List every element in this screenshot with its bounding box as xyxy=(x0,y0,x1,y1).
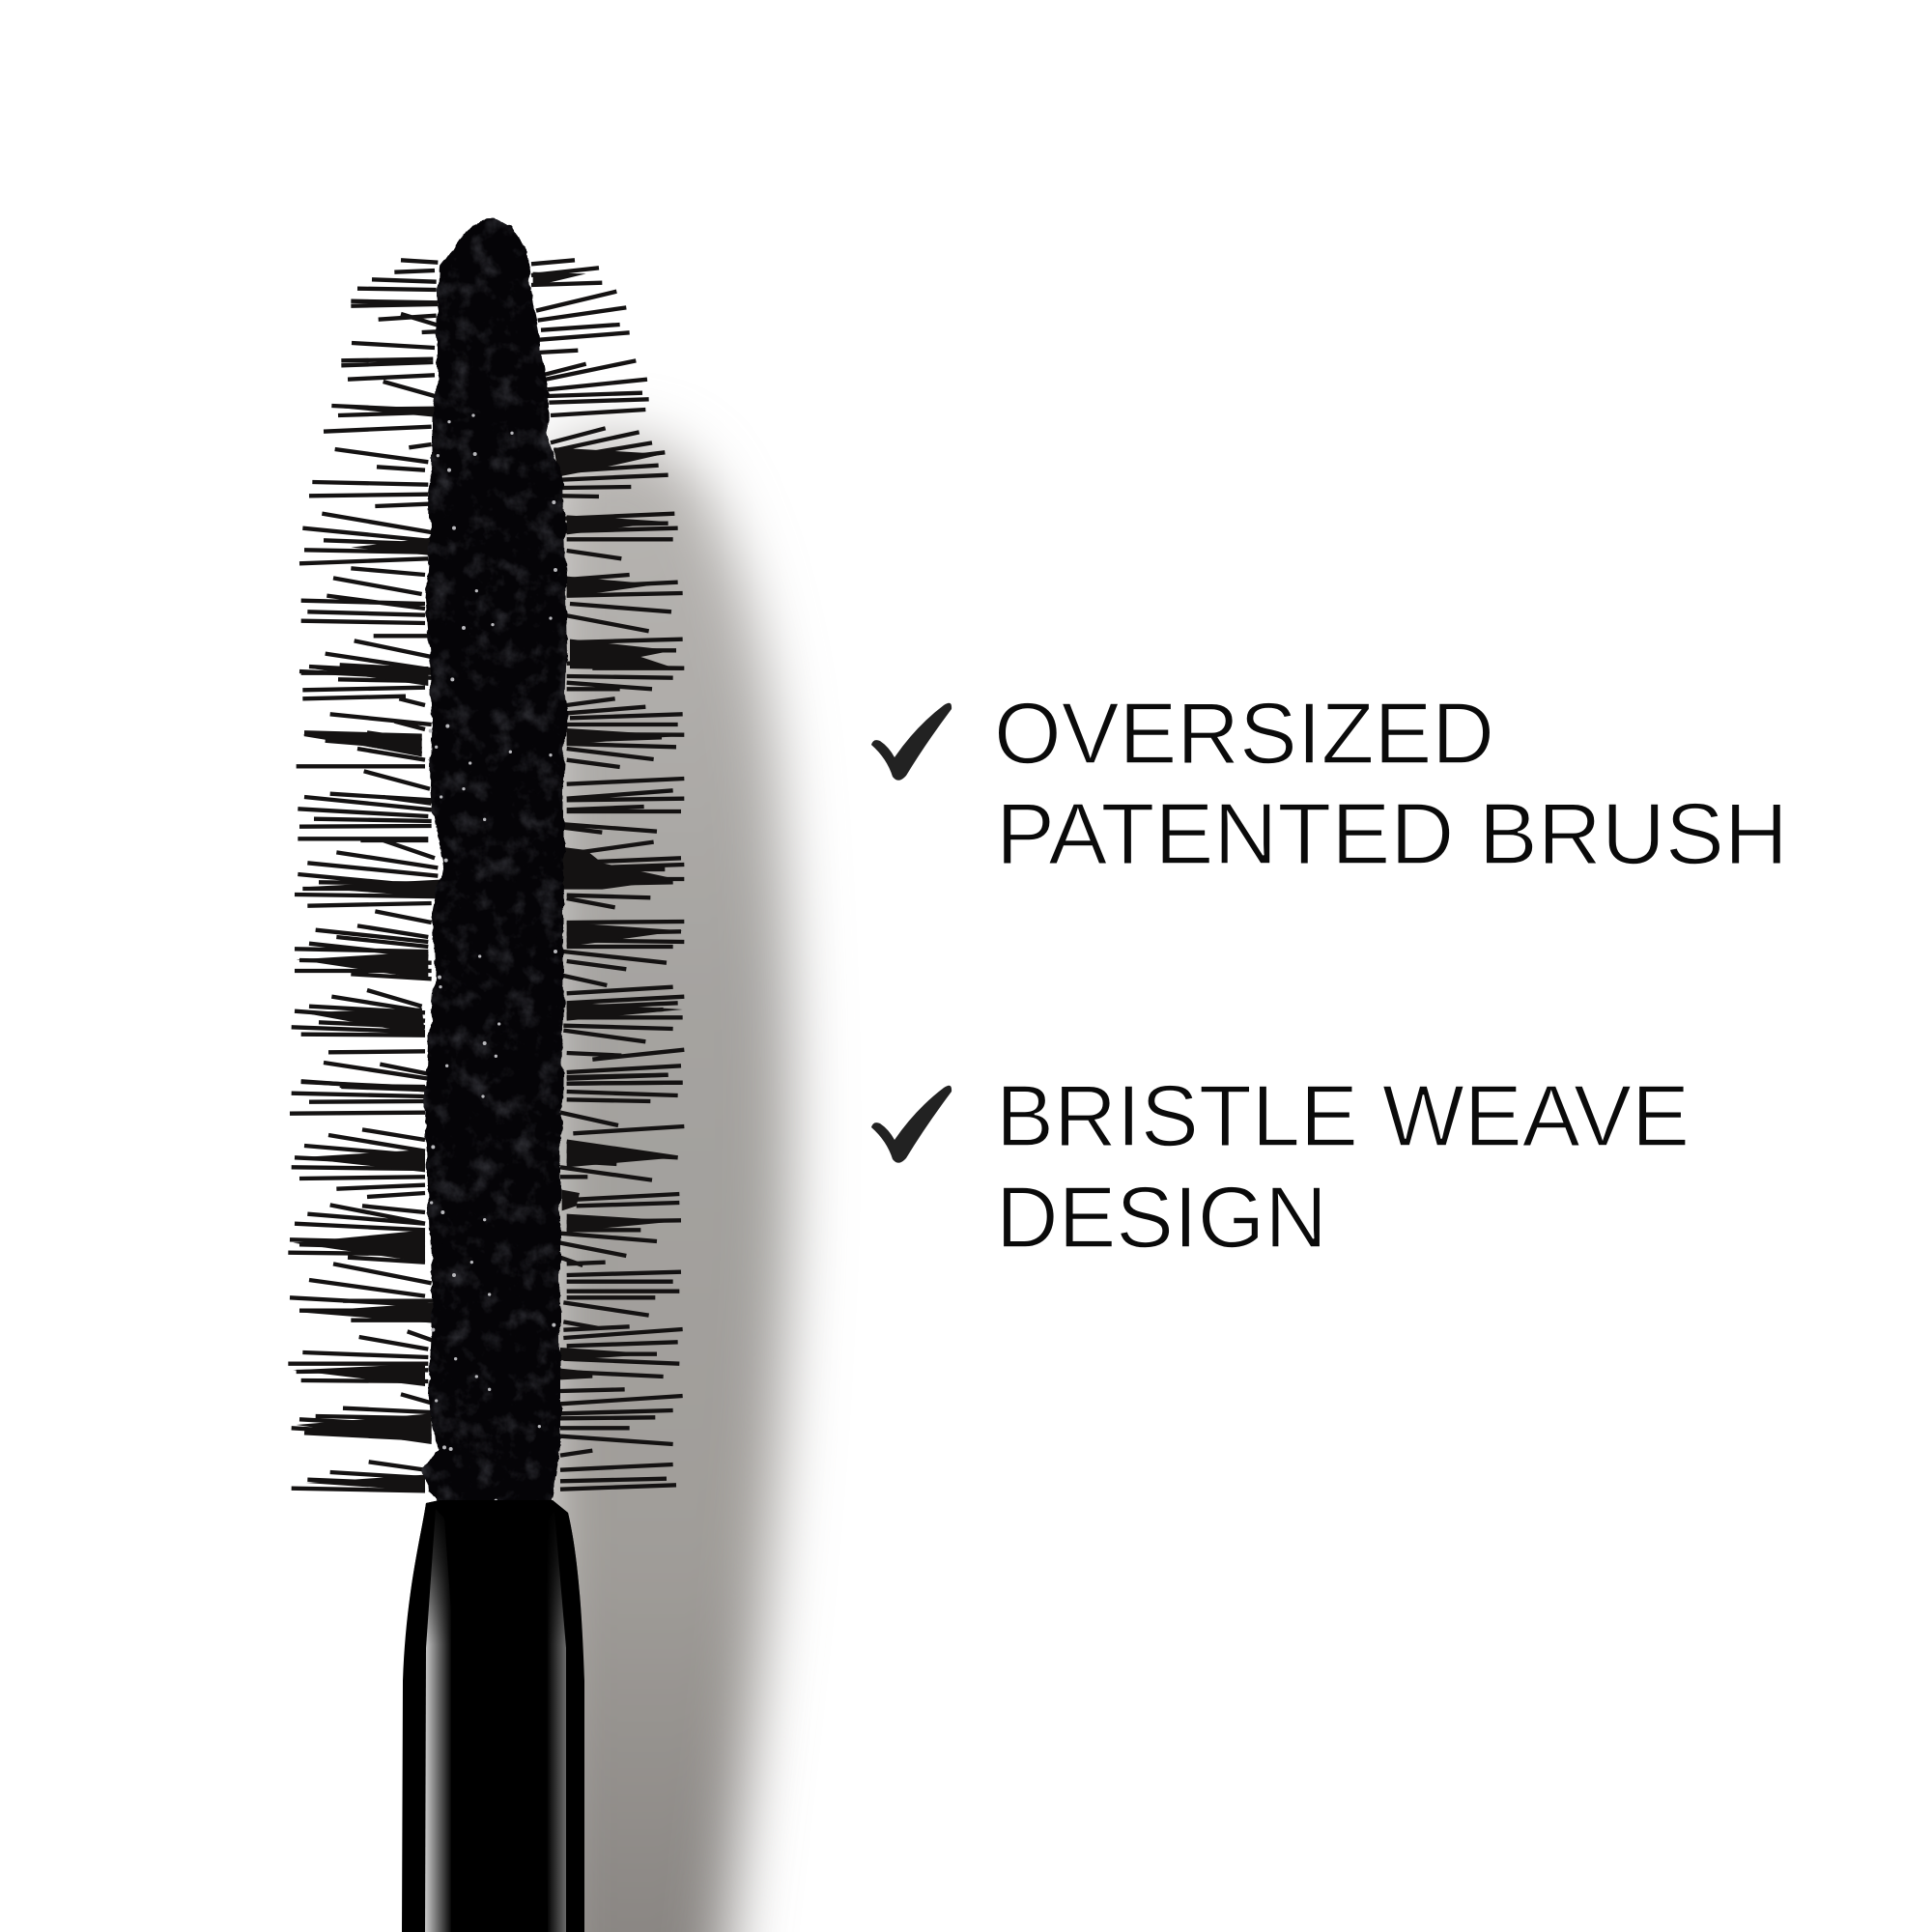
text: design: DESIGN xyxy=(996,1170,1327,1266)
cast shadow of mascara wand xyxy=(541,438,791,1932)
icon: check mark xyxy=(871,703,952,781)
bristles: lower section xyxy=(288,1075,684,1491)
bristles: upper section xyxy=(299,260,683,673)
brush core xyxy=(425,219,568,1503)
text: oversized: OVERSIZED xyxy=(994,686,1494,782)
feature: bristle weave design xyxy=(871,1068,1690,1266)
ferrule xyxy=(396,1500,589,1932)
glitter specks lower xyxy=(430,1094,555,1502)
glitter specks middle xyxy=(429,677,557,1067)
text: patented brush: PATENTED BRUSH xyxy=(996,786,1788,883)
bristles: middle section xyxy=(292,664,684,1090)
mascara wand xyxy=(288,219,684,1932)
feature: oversized patented brush xyxy=(871,686,1788,883)
glitter specks upper xyxy=(437,413,557,630)
icon: check mark xyxy=(871,1086,952,1163)
text: bristle weave: BRISTLE WEAVE xyxy=(996,1068,1690,1165)
